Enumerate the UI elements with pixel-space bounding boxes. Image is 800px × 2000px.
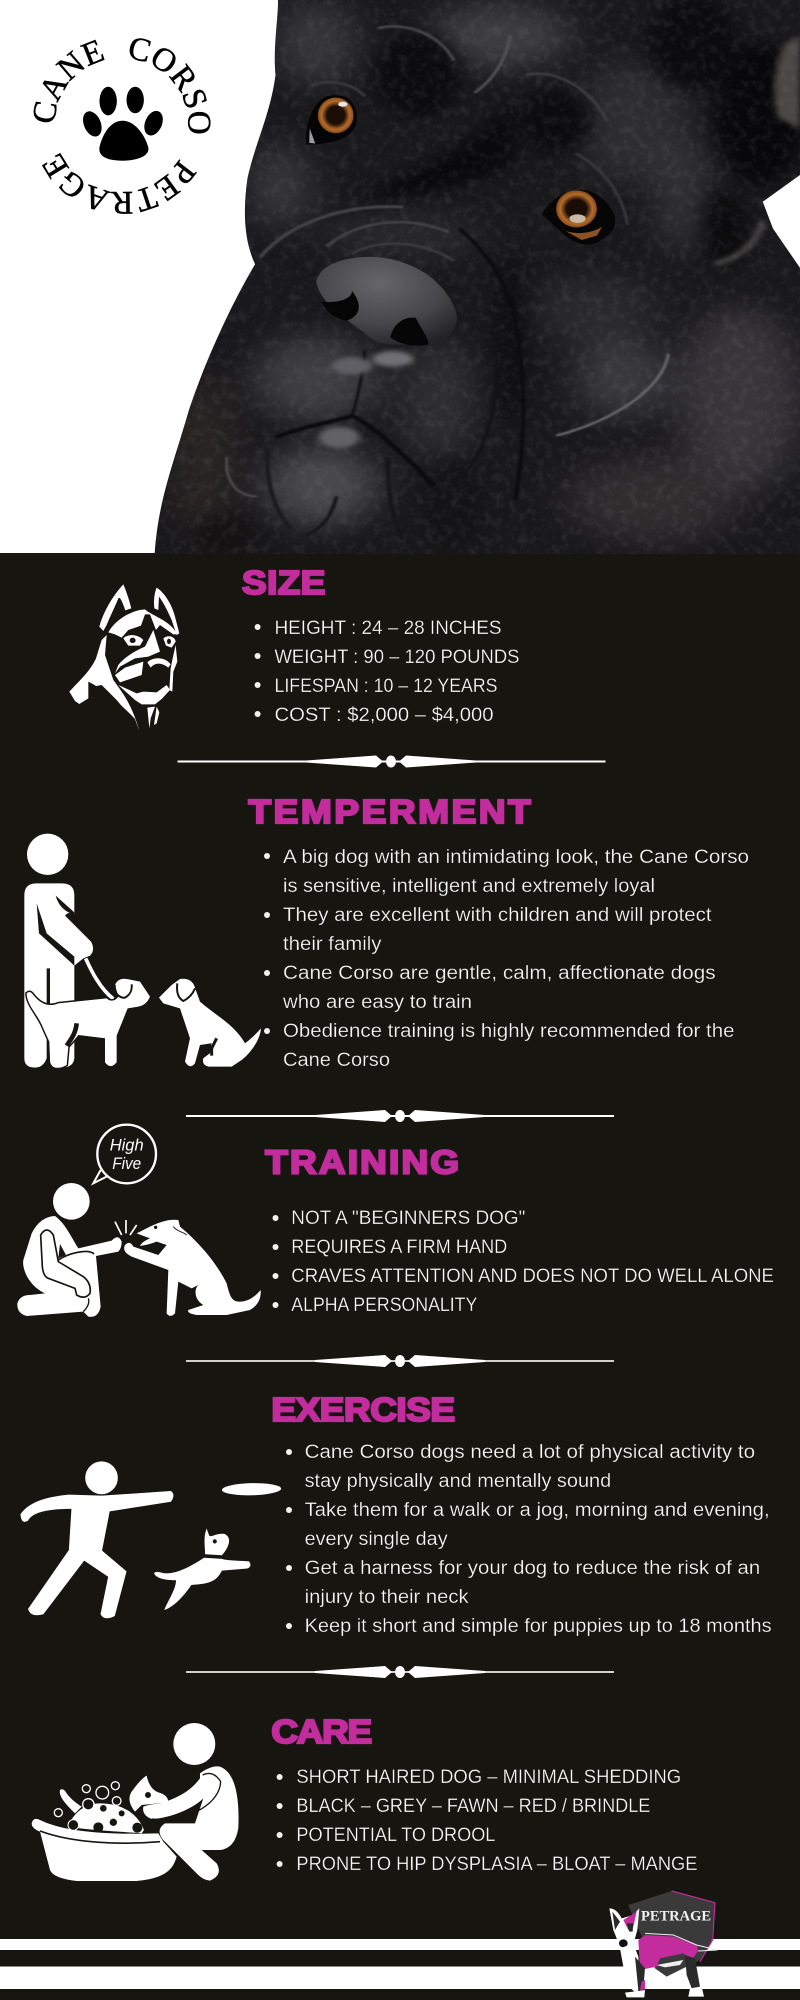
bullet list: exercise: every single day [305,1528,448,1550]
panel: care [32,1714,697,1881]
icon: person walking dog beside sitting dog [24,834,261,1068]
bullet list: temperament: who are easy to train [282,991,472,1013]
bullet list: exercise: Cane Corso dogs need a lot of physical activity to [305,1441,755,1463]
bullet list: temperament: their family [283,933,382,955]
bullet list: care [277,1766,697,1875]
icon: paw print [80,87,166,161]
icon: person bathing dog in tub [32,1723,239,1881]
left eye [306,95,357,145]
heading: training: TRAINING [265,1144,459,1181]
icon: speech bubble high five [93,1125,156,1183]
right eye [542,190,615,245]
bullet list: temperament: is sensitive, intelligent and extremely loyal [283,875,655,897]
bullet list: exercise: stay physically and mentally sound [305,1470,611,1492]
logo: petrage shield and bull terrier: PETRAGE [641,1909,711,1925]
bullet list: training: CRAVES ATTENTION AND DOES NOT DO WELL ALONE [291,1265,774,1287]
logo: cane corso petrage circular badge [34,38,211,214]
bullet list: exercise: Get a harness for your dog to reduce the risk of an [305,1557,760,1579]
bullet list: temperament: Obedience training is highly recommended for the [283,1020,735,1042]
heading: care: CARE [271,1714,372,1751]
bullet list: temperament [264,846,749,1071]
icon: dog head line art [69,584,179,731]
bullet list: size facts: WEIGHT : 90 – 120 POUNDS [274,646,520,668]
bullet list: temperament: Cane Corso [283,1049,390,1071]
bullet list: exercise: Keep it short and simple for puppies up to 18 months [305,1615,772,1637]
photo: black cane corso dog [143,0,800,557]
logo: cane corso petrage circular badge: CANE [34,40,105,122]
bullet list: size facts: HEIGHT : 24 – 28 INCHES [274,617,502,639]
dark content background [0,553,800,2000]
bullet list: exercise [286,1441,772,1637]
logo: cane corso petrage circular badge: CORSO [130,38,211,134]
bullet list: care: BLACK – GREY – FAWN – RED / BRINDLE [296,1795,650,1817]
bullet list: training: ALPHA PERSONALITY [291,1294,477,1316]
panel: temperament [24,794,749,1071]
bullet list: care: SHORT HAIRED DOG – MINIMAL SHEDDING [296,1766,681,1788]
bullet list: temperament: They are excellent with children and will protect [283,904,712,926]
bullet list: training [272,1207,774,1316]
fur texture [143,0,800,557]
icon: speech bubble high five: Five [112,1154,141,1173]
nose [316,257,457,346]
logo: petrage shield and bull terrier [609,1891,717,1997]
heading: exercise: EXERCISE [271,1392,455,1429]
icon: person throwing frisbee to dog [20,1461,281,1618]
bullet list: care: PRONE TO HIP DYSPLASIA – BLOAT – MANGE [296,1853,697,1875]
footer stripes [0,1939,800,1989]
bullet list: training: NOT A "BEGINNERS DOG" [291,1207,525,1229]
bullet list: temperament: Cane Corso are gentle, calm, affectionate dogs [283,962,716,984]
bullet list: exercise: injury to their neck [305,1586,469,1608]
bullet list: exercise: Take them for a walk or a jog, morning and evening, [305,1499,770,1521]
panel: exercise [20,1392,772,1637]
panel: training [17,1125,774,1317]
heading: size: SIZE [242,565,325,602]
heading: temperment: TEMPERMENT [248,794,531,831]
panel: hero [34,0,800,554]
panel: size [69,565,520,731]
icon: speech bubble high five: High [110,1136,144,1154]
bullet list: temperament: A big dog with an intimidating look, the Cane Corso [283,846,749,868]
bullet list: size facts: COST : $2,000 – $4,000 [274,704,494,726]
logo: cane corso petrage circular badge: PETRAGE [42,152,197,214]
bullet list: training: REQUIRES A FIRM HAND [291,1236,507,1258]
bullet list: size facts [255,617,520,726]
bullet list: size facts: LIFESPAN : 10 – 12 YEARS [274,675,498,697]
bullet list: care: POTENTIAL TO DROOL [296,1824,495,1846]
icon: person high-fiving dog [17,1183,261,1317]
